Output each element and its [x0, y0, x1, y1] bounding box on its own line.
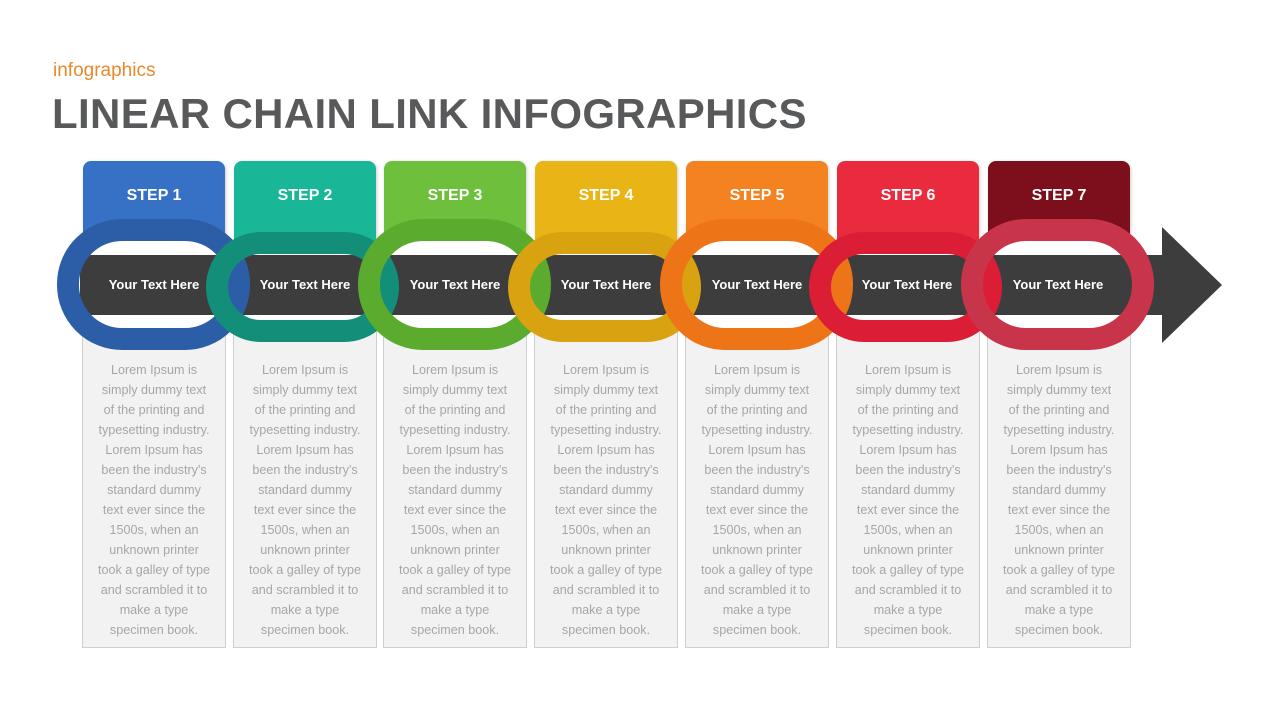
card: step 5: typesetting industry.: [701, 423, 813, 437]
bar labels: Your Text Here: [712, 277, 802, 292]
subtitle: infographics: [53, 60, 155, 81]
card: step 6: 1500s, when an: [864, 523, 952, 537]
card: step 5: 1500s, when an: [713, 523, 801, 537]
link 3: [369, 230, 540, 339]
card: step 1: standard dummy: [107, 483, 201, 497]
card: step 5: Lorem Ipsum is: [714, 363, 800, 377]
card: step 4: specimen book.: [562, 623, 650, 637]
card: step 6: took a galley of type: [852, 563, 964, 577]
card: step 1: Lorem Ipsum is: [111, 363, 197, 377]
card: step 7: typesetting industry.: [1003, 423, 1115, 437]
card: step 2: text ever since the: [254, 503, 356, 517]
card: step 7: specimen book.: [1015, 623, 1103, 637]
bar labels: Your Text Here: [410, 277, 500, 292]
link 6: [820, 243, 991, 331]
header: step 6: STEP 6: [881, 187, 935, 204]
card: step 5: standard dummy: [710, 483, 804, 497]
bar labels: Your Text Here: [1013, 277, 1103, 292]
link 4: [519, 243, 690, 331]
card: step 6: text ever since the: [857, 503, 959, 517]
card: step 1: [82, 325, 226, 648]
card: step 2: [233, 325, 377, 648]
card: step 4: been the industry's: [553, 463, 659, 477]
card: step 3: make a type: [421, 603, 489, 617]
header: step 7: [988, 161, 1130, 241]
card: step 2: of the printing and: [255, 403, 355, 417]
card: step 3: [383, 325, 527, 648]
card: step 3: been the industry's: [402, 463, 508, 477]
card: step 6: make a type: [874, 603, 942, 617]
card: step 3: of the printing and: [405, 403, 505, 417]
card: step 7: make a type: [1025, 603, 1093, 617]
arrow bar: [80, 227, 1222, 343]
card: step 2: Lorem Ipsum is: [262, 363, 348, 377]
card: step 4: [534, 325, 678, 648]
card: step 7: Lorem Ipsum is: [1016, 363, 1102, 377]
header: step 1: STEP 1: [127, 187, 181, 204]
card: step 4: standard dummy: [559, 483, 653, 497]
card: step 7: unknown printer: [1014, 543, 1104, 557]
card: step 1: unknown printer: [109, 543, 199, 557]
link interiors: [68, 230, 1143, 339]
card: step 3: unknown printer: [410, 543, 500, 557]
card: step 2: specimen book.: [261, 623, 349, 637]
card: step 1: took a galley of type: [98, 563, 210, 577]
card: step 1: and scrambled it to: [101, 583, 207, 597]
card: step 3: 1500s, when an: [411, 523, 499, 537]
header: step 7: STEP 7: [1032, 187, 1086, 204]
card: step 2: unknown printer: [260, 543, 350, 557]
card: step 2: 1500s, when an: [261, 523, 349, 537]
header: step 2: STEP 2: [278, 187, 332, 204]
card: step 1: 1500s, when an: [110, 523, 198, 537]
bar labels: Your Text Here: [109, 277, 199, 292]
card: step 1: been the industry's: [101, 463, 207, 477]
card: step 3: text ever since the: [404, 503, 506, 517]
card: step 2: Lorem Ipsum has: [256, 443, 354, 457]
card: step 6: standard dummy: [861, 483, 955, 497]
card: step 1: simply dummy text: [102, 383, 206, 397]
card: step 4: Lorem Ipsum is: [563, 363, 649, 377]
card: step 1: specimen book.: [110, 623, 198, 637]
card: step 7: 1500s, when an: [1015, 523, 1103, 537]
card: step 4: text ever since the: [555, 503, 657, 517]
card: step 5: specimen book.: [713, 623, 801, 637]
header: step 4: STEP 4: [579, 187, 633, 204]
card: step 6: typesetting industry.: [852, 423, 964, 437]
card: step 5: unknown printer: [712, 543, 802, 557]
card: step 4: 1500s, when an: [562, 523, 650, 537]
card: step 3: took a galley of type: [399, 563, 511, 577]
card: step 4: and scrambled it to: [553, 583, 659, 597]
card: step 6: [836, 325, 980, 648]
card: step 1: Lorem Ipsum has: [105, 443, 203, 457]
card: step 6: been the industry's: [855, 463, 961, 477]
card: step 2: typesetting industry.: [249, 423, 361, 437]
card: step 2: took a galley of type: [249, 563, 361, 577]
card: step 5: of the printing and: [707, 403, 807, 417]
card: step 7: of the printing and: [1009, 403, 1109, 417]
card: step 3: typesetting industry.: [399, 423, 511, 437]
card: step 7: been the industry's: [1006, 463, 1112, 477]
card: step 7: took a galley of type: [1003, 563, 1115, 577]
card: step 7: text ever since the: [1008, 503, 1110, 517]
card: step 5: [685, 325, 829, 648]
card: step 3: and scrambled it to: [402, 583, 508, 597]
card: step 2: simply dummy text: [253, 383, 357, 397]
card: step 3: specimen book.: [411, 623, 499, 637]
header: step 4: [535, 161, 677, 241]
card: step 5: been the industry's: [704, 463, 810, 477]
card: step 3: Lorem Ipsum has: [406, 443, 504, 457]
header: step 5: STEP 5: [730, 187, 784, 204]
card: step 6: unknown printer: [863, 543, 953, 557]
header: step 3: [384, 161, 526, 241]
card: step 1: typesetting industry.: [98, 423, 210, 437]
bar labels: Your Text Here: [260, 277, 350, 292]
header: step 3: STEP 3: [428, 187, 482, 204]
card: step 6: and scrambled it to: [855, 583, 961, 597]
card: step 5: and scrambled it to: [704, 583, 810, 597]
card: step 7: simply dummy text: [1007, 383, 1111, 397]
card: step 2: standard dummy: [258, 483, 352, 497]
card: step 4: took a galley of type: [550, 563, 662, 577]
card: step 5: make a type: [723, 603, 791, 617]
card: step 1: text ever since the: [103, 503, 205, 517]
card: step 6: simply dummy text: [856, 383, 960, 397]
card: step 3: Lorem Ipsum is: [412, 363, 498, 377]
card: step 1: make a type: [120, 603, 188, 617]
text cards: [82, 331, 1131, 648]
card: step 7: standard dummy: [1012, 483, 1106, 497]
bar labels: [109, 277, 1103, 292]
card: step 1: of the printing and: [104, 403, 204, 417]
card: step 6: specimen book.: [864, 623, 952, 637]
card: step 3: standard dummy: [408, 483, 502, 497]
card: step 5: simply dummy text: [705, 383, 809, 397]
link 7: [972, 230, 1143, 339]
card: step 5: Lorem Ipsum has: [708, 443, 806, 457]
bar labels: Your Text Here: [561, 277, 651, 292]
title: LINEAR CHAIN LINK INFOGRAPHICS: [52, 90, 807, 137]
link 1: [68, 230, 239, 339]
header: step 6: [837, 161, 979, 241]
card: step 4: unknown printer: [561, 543, 651, 557]
card: step 2: make a type: [271, 603, 339, 617]
card: step 7: [987, 325, 1131, 648]
card: step 6: of the printing and: [858, 403, 958, 417]
card: step 3: simply dummy text: [403, 383, 507, 397]
card: step 4: of the printing and: [556, 403, 656, 417]
step headers: [82, 160, 1132, 241]
header: step 1: [83, 161, 225, 241]
card: step 4: make a type: [572, 603, 640, 617]
card: step 7: Lorem Ipsum has: [1010, 443, 1108, 457]
card: step 4: typesetting industry.: [550, 423, 662, 437]
card: step 5: took a galley of type: [701, 563, 813, 577]
card: step 2: and scrambled it to: [252, 583, 358, 597]
card: step 6: Lorem Ipsum is: [865, 363, 951, 377]
header: step 5: [686, 161, 828, 241]
bar labels: Your Text Here: [862, 277, 952, 292]
card: step 4: Lorem Ipsum has: [557, 443, 655, 457]
card: step 7: and scrambled it to: [1006, 583, 1112, 597]
link 5: [671, 230, 842, 339]
header: step 2: [234, 161, 376, 241]
chain links: [68, 230, 1143, 339]
card: step 2: been the industry's: [252, 463, 358, 477]
link 2: [217, 243, 388, 331]
card: step 4: simply dummy text: [554, 383, 658, 397]
card: step 6: Lorem Ipsum has: [859, 443, 957, 457]
card: step 5: text ever since the: [706, 503, 808, 517]
